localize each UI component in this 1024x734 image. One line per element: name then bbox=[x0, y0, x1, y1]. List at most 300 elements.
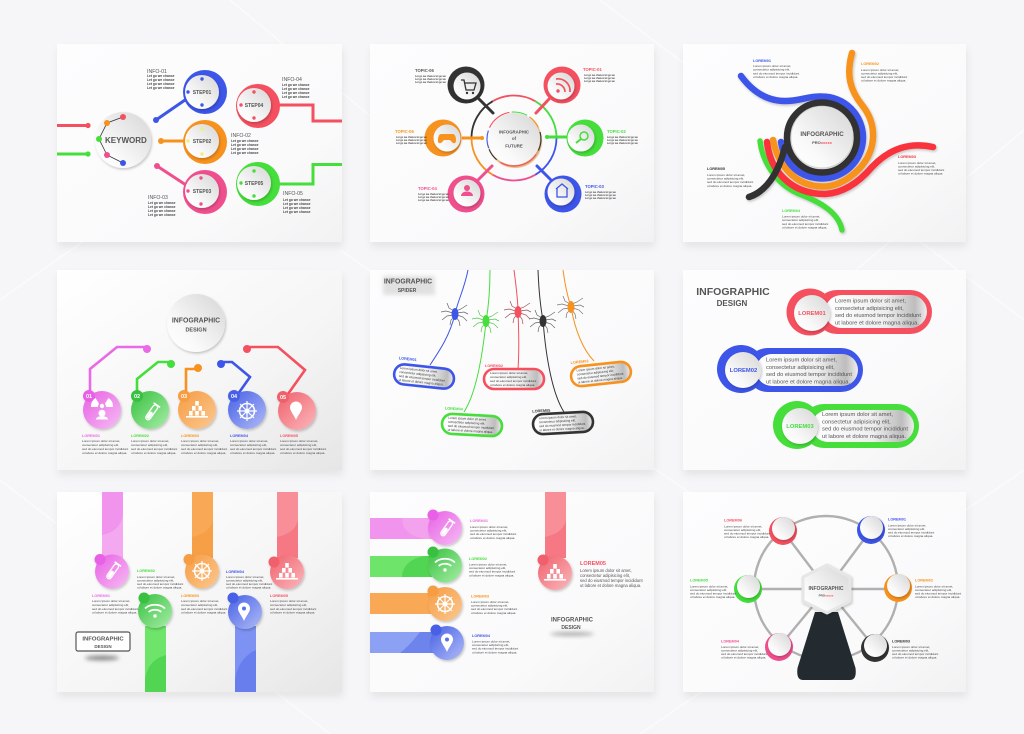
step captions: LOREM05 bbox=[280, 434, 298, 438]
captions: sed do eiusmod tempor incididunt bbox=[888, 530, 934, 534]
note orange: ut labore et dolore magna aliqua. bbox=[578, 376, 623, 384]
info 02: Let go we chance bbox=[231, 151, 259, 155]
captions: consectetur adipisicing elit, bbox=[181, 603, 218, 607]
captions: ut labore et dolore magna aliqua. bbox=[915, 595, 960, 599]
note orange: sed do eiusmod tempor incididunt bbox=[577, 372, 624, 380]
note red: consectetur adipisicing elit, bbox=[490, 375, 527, 379]
node pink bbox=[765, 633, 793, 661]
step 01 bbox=[153, 70, 227, 123]
info 01: Let go we chance bbox=[147, 74, 175, 78]
info 04: Let go we chance bbox=[282, 91, 310, 95]
captions: sed do eiusmod tempor incididunt bbox=[915, 592, 961, 596]
step 02: STEP02 bbox=[193, 139, 212, 145]
captions: LOREM03 bbox=[181, 594, 199, 598]
info 03: Let go we chance bbox=[148, 205, 176, 209]
captions: consectetur adipisicing elit, bbox=[915, 588, 952, 592]
title box bbox=[76, 632, 130, 660]
step captions: consectetur adipisicing elit, bbox=[181, 443, 218, 447]
node blue bbox=[857, 516, 885, 544]
step captions: Lorem ipsum dolor sit amet, bbox=[230, 439, 268, 443]
pill green: Lorem ipsum dolor sit amet, bbox=[822, 412, 893, 418]
pill green: LOREM03 bbox=[786, 424, 814, 430]
lorem 02: Lorem ipsum dolor sit amet, bbox=[861, 68, 899, 72]
info 01: Let go we chance bbox=[147, 86, 175, 90]
info 04: INFO-04 bbox=[282, 77, 302, 83]
captions: Lorem ipsum dolor sit amet, bbox=[471, 600, 509, 604]
note red: LOREM02 bbox=[485, 364, 503, 368]
title bbox=[696, 286, 770, 308]
lorem 05 bbox=[707, 167, 753, 188]
captions: ut labore et dolore magna aliqua. bbox=[690, 595, 735, 599]
topic 04 person bbox=[448, 166, 492, 212]
step 01 radiation bbox=[83, 390, 121, 429]
captions: Lorem ipsum dolor sit amet, bbox=[137, 575, 175, 579]
step captions: sed do eiusmod tempor incididunt bbox=[82, 447, 128, 451]
bar 5 pyramid bbox=[538, 492, 572, 590]
lorem 02: sed do eiusmod tempor incididunt bbox=[861, 75, 907, 79]
step 02 tube: 02 bbox=[134, 394, 140, 400]
bar 2 wifi bbox=[138, 592, 172, 692]
captions: LOREM04 bbox=[472, 634, 491, 638]
bar 3 wheel bbox=[370, 586, 462, 621]
captions: ut labore et dolore magna aliqua. bbox=[721, 656, 766, 660]
info 04 bbox=[282, 77, 310, 99]
stand bbox=[797, 612, 856, 680]
lorem 04: consectetur adipisicing elit, bbox=[782, 218, 819, 222]
lorem 03: consectetur adipisicing elit, bbox=[898, 164, 935, 168]
captions: ut labore et dolore magna aliqua. bbox=[472, 650, 517, 654]
topic labels: TOPIC-03 bbox=[585, 184, 604, 189]
info 03: Let go we chance bbox=[148, 213, 176, 217]
lorem 04: sed do eiusmod tempor incididunt bbox=[782, 222, 828, 226]
step captions: sed do eiusmod tempor incididunt bbox=[280, 447, 326, 451]
lorem 01: consectetur adipisicing elit, bbox=[753, 68, 790, 72]
node green bbox=[734, 575, 762, 603]
captions: consectetur adipisicing elit, bbox=[226, 578, 263, 582]
note green: ut labore et dolore magna aliqua. bbox=[448, 428, 493, 434]
pill green: sed do eiusmod tempor incididunt bbox=[822, 426, 908, 432]
captions: LOREM04 bbox=[226, 570, 245, 574]
captions: ut labore et dolore magna aliqua. bbox=[888, 534, 933, 538]
captions bbox=[92, 569, 316, 614]
centre circle: INFOGRAPHIC bbox=[800, 131, 844, 138]
captions: Lorem ipsum dolor sit amet, bbox=[470, 525, 508, 529]
captions: consectetur adipisicing elit, bbox=[892, 648, 929, 652]
step captions bbox=[82, 434, 326, 455]
keyword hub bbox=[95, 112, 151, 168]
step 04: STEP04 bbox=[245, 103, 264, 109]
pill red bbox=[786, 288, 932, 336]
title circle bbox=[167, 294, 225, 352]
captions: ut labore et dolore magna aliqua. bbox=[270, 610, 315, 614]
pill green bbox=[773, 401, 919, 449]
lorem 05 callout: sed do eiusmod tempor incididunt bbox=[580, 578, 643, 583]
panel: infographic of future bbox=[370, 44, 654, 242]
captions: Lorem ipsum dolor sit amet, bbox=[888, 524, 926, 528]
panel: design with pills bbox=[683, 270, 966, 470]
note green: Lorem ipsum dolor sit amet, bbox=[448, 416, 487, 422]
bar 3 wheel bbox=[184, 492, 219, 588]
lorem 01 bbox=[753, 59, 799, 79]
info 02 bbox=[231, 133, 259, 155]
title circle: INFOGRAPHIC bbox=[172, 318, 220, 324]
info 03 bbox=[148, 195, 176, 217]
node black bbox=[861, 634, 889, 662]
step captions: consectetur adipisicing elit, bbox=[230, 443, 267, 447]
bar 5 pyramid bbox=[268, 492, 304, 589]
topic labels: Let go we chance let go we bbox=[584, 80, 615, 83]
topic labels: TOPIC-06 bbox=[415, 68, 434, 73]
note blue: ut labore et dolore magna aliqua. bbox=[398, 378, 444, 387]
captions: sed do eiusmod tempor incididunt bbox=[724, 532, 770, 536]
step 03 pyramid bbox=[178, 390, 216, 429]
title: INFOGRAPHIC bbox=[551, 618, 594, 624]
step 03: STEP03 bbox=[193, 189, 212, 195]
captions: ut labore et dolore magna aliqua. bbox=[181, 610, 226, 614]
connectors bbox=[90, 347, 305, 395]
centre circle: PROxxxxx bbox=[812, 140, 833, 145]
step captions: consectetur adipisicing elit, bbox=[280, 443, 317, 447]
centre hub: INFOGRAPHIC bbox=[499, 130, 529, 134]
step 03 pyramid: 03 bbox=[181, 394, 187, 400]
lorem 03: ut labore et dolore magna aliqua. bbox=[898, 172, 943, 176]
captions: ut labore et dolore magna aliqua. bbox=[471, 611, 516, 615]
bar 1 tube bbox=[370, 510, 462, 545]
captions: consectetur adipisicing elit, bbox=[888, 527, 925, 531]
lorem 05 callout: ut labore et dolore magna aliqua. bbox=[580, 583, 641, 588]
note orange: consectetur adipisicing elit, bbox=[577, 369, 614, 377]
captions: sed do eiusmod tempor incididunt bbox=[721, 652, 767, 656]
pill green: ut labore et dolore magna aliqua. bbox=[822, 434, 906, 440]
note red: ut labore et dolore magna aliqua. bbox=[490, 383, 535, 387]
step 02 bbox=[158, 120, 227, 164]
wheel ring and spokes bbox=[748, 516, 898, 660]
input arrows bbox=[57, 123, 91, 157]
pill red: Lorem ipsum dolor sit amet, bbox=[835, 298, 906, 304]
captions: LOREM04 bbox=[721, 640, 740, 644]
captions: LOREM02 bbox=[137, 569, 155, 573]
info 04: Let go we chance bbox=[282, 87, 310, 91]
note black: LOREM05 bbox=[532, 409, 550, 414]
captions: sed do eiusmod tempor incididunt bbox=[892, 652, 938, 656]
step captions: consectetur adipisicing elit, bbox=[131, 443, 168, 447]
topic labels: Let go we chance let go we bbox=[607, 142, 638, 145]
note blue: Lorem ipsum dolor sit amet, bbox=[400, 366, 438, 374]
info 05 bbox=[283, 191, 311, 214]
captions: consectetur adipisicing elit, bbox=[469, 566, 506, 570]
panel: design with five connectors bbox=[57, 270, 342, 470]
topic labels: TOPIC-01 bbox=[583, 67, 602, 72]
info 03: INFO-03 bbox=[148, 195, 168, 201]
lorem 02: LOREM02 bbox=[861, 62, 879, 66]
lorem 04: LOREM04 bbox=[782, 209, 801, 213]
step 04 wheel: 04 bbox=[231, 394, 238, 400]
step captions: LOREM03 bbox=[181, 434, 199, 438]
topic labels: Let go we chance let go we bbox=[415, 81, 446, 84]
lorem 02: consectetur adipisicing elit, bbox=[861, 72, 898, 76]
title: INFOGRAPHIC bbox=[696, 286, 770, 298]
panel: keyword steps bbox=[57, 44, 342, 242]
captions: LOREM05 bbox=[270, 594, 288, 598]
panel: vertical bars bbox=[57, 492, 342, 692]
captions: LOREM01 bbox=[888, 518, 906, 522]
topic labels: Let go we chance let go we bbox=[396, 136, 427, 139]
note red: Lorem ipsum dolor sit amet, bbox=[490, 371, 528, 375]
info 02: Let go we chance bbox=[231, 143, 259, 147]
captions: consectetur adipisicing elit, bbox=[270, 603, 307, 607]
step 02 tube bbox=[131, 390, 169, 429]
lorem 05: sed do eiusmod tempor incididunt bbox=[707, 180, 753, 184]
title: SPIDER bbox=[398, 288, 417, 294]
pill red: consectetur adipisicing elit, bbox=[835, 306, 904, 312]
bar 4 pin bbox=[228, 592, 262, 692]
centre hub bbox=[476, 101, 552, 177]
title box: DESIGN bbox=[94, 644, 112, 649]
step 04 bbox=[236, 84, 342, 128]
note blue: LOREM01 bbox=[399, 356, 417, 362]
step captions: ut labore et dolore magna aliqua. bbox=[131, 451, 176, 455]
captions: LOREM01 bbox=[92, 594, 110, 598]
hexagon hub bbox=[803, 565, 850, 613]
title: INFOGRAPHIC bbox=[384, 278, 432, 286]
step captions: ut labore et dolore magna aliqua. bbox=[82, 451, 127, 455]
curved ribbons bbox=[741, 53, 933, 230]
captions: consectetur adipisicing elit, bbox=[471, 604, 508, 608]
topic 06 cart bbox=[448, 66, 493, 113]
pill red: sed do eiusmod tempor incididunt bbox=[835, 313, 921, 319]
info 01: Let go we chance bbox=[147, 82, 175, 86]
captions: LOREM03 bbox=[892, 640, 910, 644]
node red bbox=[769, 517, 797, 545]
captions: sed do eiusmod tempor incididunt bbox=[472, 646, 518, 650]
captions: ut labore et dolore magna aliqua. bbox=[226, 586, 271, 590]
bar 2 wifi bbox=[370, 546, 462, 582]
centre hub: FUTURE bbox=[505, 144, 523, 148]
lorem 03 bbox=[898, 155, 944, 176]
info 05: INFO-05 bbox=[283, 191, 303, 197]
captions: ut labore et dolore magna aliqua. bbox=[469, 574, 514, 578]
step 04 wheel bbox=[228, 390, 266, 429]
topic labels: TOPIC-05 bbox=[395, 129, 414, 134]
step 05 bbox=[236, 162, 342, 206]
spider green bbox=[472, 310, 499, 333]
pill blue: Lorem ipsum dolor sit amet, bbox=[766, 358, 837, 364]
captions: ut labore et dolore magna aliqua. bbox=[470, 536, 515, 540]
captions: LOREM05 bbox=[690, 578, 708, 582]
step captions: consectetur adipisicing elit, bbox=[82, 443, 119, 447]
captions: sed do eiusmod tempor incididunt bbox=[92, 607, 138, 611]
captions: Lorem ipsum dolor sit amet, bbox=[469, 562, 507, 566]
title bbox=[550, 618, 594, 636]
note green: sed do eiusmod tempor incididunt bbox=[448, 424, 494, 430]
note black: Lorem ipsum dolor sit amet, bbox=[539, 414, 577, 420]
spider black bbox=[529, 310, 556, 333]
captions: Lorem ipsum dolor sit amet, bbox=[92, 599, 130, 603]
captions: LOREM02 bbox=[915, 578, 933, 582]
note blue bbox=[393, 356, 456, 390]
lorem 05: ut labore et dolore magna aliqua. bbox=[707, 184, 752, 188]
step 01: STEP01 bbox=[193, 90, 212, 96]
title bbox=[383, 276, 435, 295]
lorem 01: ut labore et dolore magna aliqua. bbox=[753, 75, 798, 79]
pill blue: LOREM02 bbox=[730, 368, 757, 374]
captions: ut labore et dolore magna aliqua. bbox=[724, 535, 769, 539]
lorem 05 callout: Lorem ipsum dolor sit amet, bbox=[580, 568, 632, 573]
hexagon hub: INFOGRAPHIC bbox=[808, 586, 844, 592]
topic labels: Let go we chance let go we bbox=[418, 193, 449, 196]
topic labels: Let go we chance let go we bbox=[415, 75, 446, 78]
captions: consectetur adipisicing elit, bbox=[724, 528, 761, 532]
captions: sed do eiusmod tempor incididunt bbox=[181, 607, 227, 611]
captions: consectetur adipisicing elit, bbox=[472, 643, 509, 647]
captions: sed do eiusmod tempor incididunt bbox=[471, 607, 517, 611]
info 01 bbox=[147, 69, 175, 90]
topic labels: TOPIC-02 bbox=[607, 129, 626, 134]
note blue: sed do eiusmod tempor incididunt bbox=[399, 374, 445, 383]
connector dots bbox=[143, 345, 251, 372]
captions bbox=[469, 519, 518, 654]
note orange: LOREM03 bbox=[570, 359, 589, 365]
step captions: LOREM02 bbox=[131, 434, 149, 438]
step captions: sed do eiusmod tempor incididunt bbox=[131, 447, 177, 451]
step captions: LOREM01 bbox=[82, 434, 100, 438]
topic labels: Let go we chance let go we bbox=[418, 196, 449, 199]
note orange bbox=[569, 355, 632, 387]
step 05 pin: 05 bbox=[280, 395, 286, 401]
info 05: Let go we chance bbox=[283, 198, 311, 202]
note black: sed do eiusmod tempor incididunt bbox=[539, 422, 586, 428]
topic labels bbox=[395, 67, 638, 202]
spider orange bbox=[557, 296, 584, 319]
captions: LOREM03 bbox=[471, 594, 489, 598]
lorem 05: Lorem ipsum dolor sit amet, bbox=[707, 173, 745, 177]
spider red bbox=[504, 301, 531, 324]
step 01 radiation: 01 bbox=[86, 394, 92, 400]
lorem 05 callout bbox=[580, 561, 643, 588]
captions: LOREM02 bbox=[469, 557, 487, 561]
info 01: Let go we chance bbox=[147, 78, 175, 82]
pill blue: ut labore et dolore magna aliqua. bbox=[766, 380, 850, 386]
pill red: LOREM01 bbox=[798, 311, 826, 317]
lorem 02 bbox=[861, 62, 907, 82]
captions: consectetur adipisicing elit, bbox=[92, 603, 129, 607]
step captions: Lorem ipsum dolor sit amet, bbox=[280, 439, 318, 443]
step captions: ut labore et dolore magna aliqua. bbox=[181, 451, 226, 455]
lorem 05: LOREM05 bbox=[707, 167, 725, 171]
lorem 01: sed do eiusmod tempor incididunt bbox=[753, 72, 799, 76]
lorem 03: Lorem ipsum dolor sit amet, bbox=[898, 161, 936, 165]
lorem 05 callout: LOREM05 bbox=[580, 561, 606, 567]
topic 01 rss bbox=[536, 66, 580, 113]
note black bbox=[532, 406, 593, 435]
captions: sed do eiusmod tempor incididunt bbox=[137, 582, 183, 586]
panel: horizontal bars bbox=[370, 492, 654, 692]
title: DESIGN bbox=[561, 625, 581, 631]
topic labels: Let go we chance let go we bbox=[585, 194, 616, 197]
lorem 05: consectetur adipisicing elit, bbox=[707, 176, 744, 180]
note red: sed do eiusmod tempor incididunt bbox=[490, 379, 536, 383]
captions: Lorem ipsum dolor sit amet, bbox=[472, 640, 510, 644]
pill green: consectetur adipisicing elit, bbox=[822, 420, 891, 426]
step captions: Lorem ipsum dolor sit amet, bbox=[131, 439, 169, 443]
panel: spiral ribbons bbox=[683, 44, 966, 242]
captions: sed do eiusmod tempor incididunt bbox=[469, 570, 515, 574]
centre hub: of bbox=[512, 136, 517, 141]
pill blue: consectetur adipisicing elit, bbox=[766, 365, 835, 371]
node orange bbox=[884, 574, 912, 602]
topic labels: Let go we chance let go we bbox=[607, 136, 638, 139]
info 02: Let go we chance bbox=[231, 139, 259, 143]
lorem 01: Lorem ipsum dolor sit amet, bbox=[753, 64, 791, 68]
captions: Lorem ipsum dolor sit amet, bbox=[724, 524, 762, 528]
info 04: Let go we chance bbox=[282, 83, 310, 87]
captions: ut labore et dolore magna aliqua. bbox=[92, 610, 137, 614]
hexagon hub: PROxxxxx bbox=[819, 594, 834, 598]
topic 05 gamepad bbox=[424, 120, 484, 156]
title: DESIGN bbox=[717, 299, 748, 308]
step captions: ut labore et dolore magna aliqua. bbox=[230, 451, 275, 455]
note blue: consectetur adipisicing elit, bbox=[399, 370, 437, 378]
step captions: sed do eiusmod tempor incididunt bbox=[230, 447, 276, 451]
captions bbox=[690, 518, 961, 660]
captions: sed do eiusmod tempor incididunt bbox=[690, 592, 736, 596]
topic 02 search bbox=[545, 120, 604, 156]
captions: consectetur adipisicing elit, bbox=[137, 578, 174, 582]
pill blue: sed do eiusmod tempor incididunt bbox=[766, 372, 852, 378]
topic labels: Let go we chance let go we bbox=[396, 142, 427, 145]
captions: sed do eiusmod tempor incididunt bbox=[270, 607, 316, 611]
lorem 02: ut labore et dolore magna aliqua. bbox=[861, 78, 906, 82]
lorem 03: LOREM03 bbox=[898, 155, 916, 159]
note black: consectetur adipisicing elit, bbox=[539, 418, 576, 424]
segmented ring bbox=[472, 96, 556, 180]
topic labels: Let go we chance let go we bbox=[584, 77, 615, 80]
captions: Lorem ipsum dolor sit amet, bbox=[270, 599, 308, 603]
topic labels: Let go we chance let go we bbox=[607, 139, 638, 142]
pill blue bbox=[717, 345, 863, 393]
step captions: Lorem ipsum dolor sit amet, bbox=[82, 439, 120, 443]
captions: Lorem ipsum dolor sit amet, bbox=[181, 599, 219, 603]
note red bbox=[484, 364, 544, 389]
topic labels: Let go we chance let go we bbox=[584, 74, 615, 77]
captions: sed do eiusmod tempor incididunt bbox=[226, 582, 272, 586]
note green: consectetur adipisicing elit, bbox=[448, 420, 485, 426]
lorem 04: ut labore et dolore magna aliqua. bbox=[782, 226, 827, 230]
captions: LOREM06 bbox=[724, 518, 742, 522]
info 02: Let go we chance bbox=[231, 147, 259, 151]
threads bbox=[430, 270, 594, 412]
captions: sed do eiusmod tempor incididunt bbox=[470, 532, 516, 536]
note green: LOREM04 bbox=[445, 407, 464, 412]
captions: Lorem ipsum dolor sit amet, bbox=[721, 645, 759, 649]
panel: infographic spider bbox=[370, 270, 654, 470]
topic labels: TOPIC-04 bbox=[418, 186, 437, 191]
topic labels: Let go we chance let go we bbox=[396, 139, 427, 142]
bar 1 tube bbox=[94, 492, 129, 588]
info 03: Let go we chance bbox=[148, 201, 176, 205]
captions: consectetur adipisicing elit, bbox=[470, 528, 507, 532]
step 05 pin bbox=[277, 391, 316, 430]
lorem 03: sed do eiusmod tempor incididunt bbox=[898, 168, 944, 172]
captions: Lorem ipsum dolor sit amet, bbox=[690, 584, 728, 588]
captions: Lorem ipsum dolor sit amet, bbox=[226, 575, 264, 579]
info 01: INFO-01 bbox=[147, 69, 167, 75]
title box: INFOGRAPHIC bbox=[82, 636, 124, 642]
bar 4 pin bbox=[370, 624, 464, 660]
step captions: Lorem ipsum dolor sit amet, bbox=[181, 439, 219, 443]
centre circle bbox=[792, 106, 852, 168]
topic 03 home bbox=[537, 166, 582, 212]
